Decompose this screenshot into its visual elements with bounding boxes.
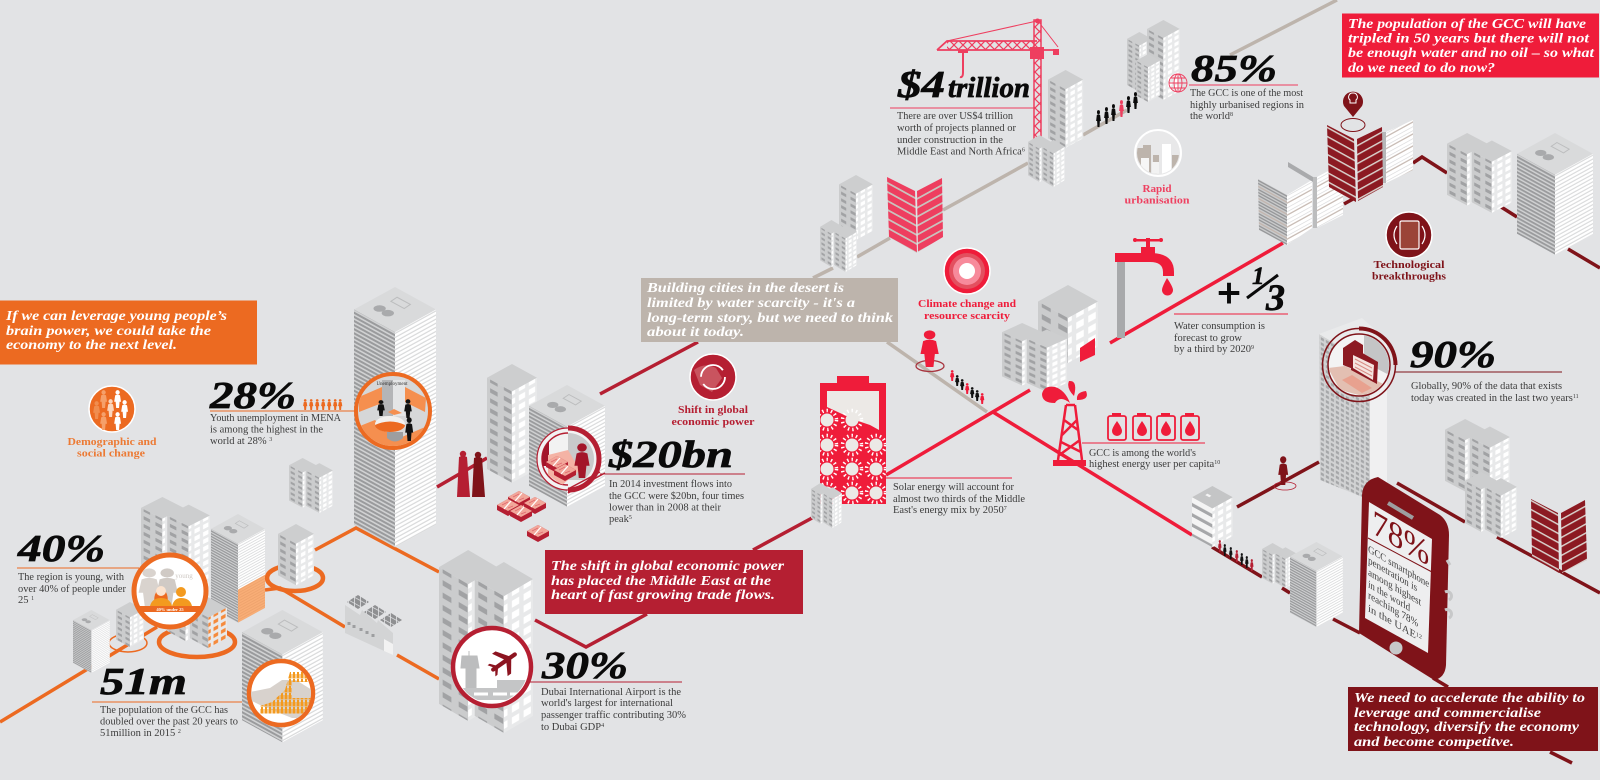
- label: climate change and resource scarcity: [918, 298, 1016, 322]
- illustration: smartphone with 78% stat: in the world: [1368, 579, 1411, 614]
- stat: $20bn investment: 5: [629, 515, 632, 521]
- stat: 90% data: 90%: [1410, 334, 1496, 376]
- stat: 30% Dubai airport: 4: [601, 723, 604, 729]
- building: wide striped complex: [1258, 162, 1343, 245]
- illustration: smartphone with 78% stat: among highest: [1368, 567, 1422, 609]
- stat: 51m population: 2: [178, 729, 181, 735]
- figures: business man on deep red line: [1274, 456, 1296, 490]
- building: small floors block: [1192, 486, 1233, 547]
- building: window tower: [487, 364, 537, 483]
- icon: fuel barrels: [1108, 413, 1199, 440]
- figures: Gulf couple: [457, 451, 485, 497]
- callout: accelerate technology: technology, diversify the economy: [1354, 720, 1580, 735]
- label: demographic and social change: [68, 436, 156, 460]
- circle: GCC population growth: [249, 661, 313, 725]
- building: tall striped tower: [354, 287, 436, 547]
- stat: 30% Dubai airport: to Dubai GDP: [541, 722, 601, 733]
- building: tower beside crane: [1048, 70, 1083, 148]
- icon: rapid urbanisation skyline: [1135, 130, 1181, 178]
- building: twin right: [1447, 133, 1512, 213]
- label: technological breakthroughs: Technological: [1374, 259, 1444, 271]
- building: twin beside crane: [1028, 135, 1065, 187]
- building: striped tower right: [1517, 133, 1593, 255]
- stat: 85% urbanised: [1189, 48, 1305, 122]
- stat: 40% young: 40%: [17, 528, 105, 570]
- building: small striped block: [73, 610, 110, 673]
- circle: unemployment meeting room: [355, 374, 430, 450]
- callout: shift in global economic power: has placed the Middle East at the: [551, 574, 771, 589]
- stat: 40% young: 25: [18, 595, 28, 606]
- route line: deep red technology path: [1212, 157, 1600, 763]
- stat: plus one third water: [1174, 263, 1288, 355]
- callout: young people's brain power: If we can leverage young people’s: [5, 309, 228, 324]
- text: solar energy: [886, 478, 1025, 516]
- illustration: smartphone with 78% stat: 12: [1416, 631, 1422, 641]
- stat: $20bn investment: the GCC were $20bn, four times: [609, 491, 744, 502]
- building: small window tower with ring: [278, 524, 314, 585]
- icon: technological breakthroughs tablet: [1386, 212, 1432, 258]
- stat: $4 trillion projects: trillion: [948, 73, 1030, 104]
- building: tower by urban line: [839, 175, 873, 240]
- label: shift in global economic power: economic power: [672, 416, 755, 428]
- building: small twin block: [289, 458, 333, 513]
- label: technological breakthroughs: [1372, 259, 1447, 282]
- stat: 30% Dubai airport: 30%: [541, 645, 628, 687]
- label: climate change and resource scarcity: resource scarcity: [924, 310, 1011, 322]
- callout: accelerate technology: and become competitve.: [1354, 735, 1514, 750]
- text: energy user per capita: 10: [1214, 460, 1220, 466]
- callout: building cities in the desert: about it today.: [647, 325, 744, 340]
- stat: plus one third water: Water consumption is: [1174, 321, 1265, 332]
- route line: taupe urbanisation path: [813, 0, 1337, 412]
- stat: 85% urbanised: the world: [1190, 111, 1230, 122]
- callout: accelerate technology: We need to accelerate the ability to: [1354, 691, 1585, 706]
- circle: young people under 25: 40% under 25: [156, 607, 184, 612]
- stat: 28% youth unemployment: [209, 375, 357, 447]
- stat: $20bn investment: $20bn: [608, 434, 733, 476]
- label: demographic and social change: social change: [77, 448, 145, 460]
- figures: people row on resource line: [950, 370, 984, 404]
- label: demographic and social change: Demographic and: [68, 436, 156, 448]
- stat: 51m population: 51m: [100, 661, 187, 703]
- label: rapid urbanisation: [1124, 183, 1190, 206]
- stat: 30% Dubai airport: [530, 645, 686, 733]
- building: large twin block: [141, 497, 210, 613]
- illustration: money stacks large: [497, 491, 546, 522]
- stat: $4 trillion projects: Middle East and North Africa: [897, 146, 1022, 158]
- callout: building cities in the desert: long-term story, but we need to think: [647, 311, 893, 326]
- label: shift in global economic power: Shift in global: [678, 404, 748, 416]
- callout: building cities in the desert: [641, 278, 898, 342]
- stat: $4 trillion projects: [890, 64, 1035, 158]
- illustration: smartphone with 78% stat: in the UAE: [1368, 603, 1416, 641]
- illustration: smartphone with 78% stat: reaching 78%: [1368, 590, 1419, 630]
- stat: 51m population: The population of the GCC has: [100, 705, 228, 716]
- callout: population tripled: be enough water and no oil – so what: [1348, 46, 1595, 61]
- stat: plus one third water: 9: [1251, 345, 1254, 351]
- text: energy user per capita: [1082, 442, 1220, 470]
- callout: shift in global economic power: The shift in global economic power: [551, 559, 785, 574]
- text: energy user per capita: GCC is among the world's: [1089, 448, 1196, 459]
- stat: 90% data: [1395, 334, 1579, 404]
- label: shift in global economic power: [672, 404, 755, 428]
- callout: young people's brain power: [0, 300, 257, 364]
- building: small twin near battery: [811, 483, 842, 528]
- stat: $20bn investment: [600, 434, 745, 525]
- building: twin upper right: [1445, 419, 1510, 499]
- illustration: solar battery: [818, 376, 886, 504]
- callout: population tripled: tripled in 50 years but there will not: [1348, 32, 1590, 46]
- figures: red man on ring: [916, 330, 944, 372]
- building: dark red facade right: [1531, 499, 1587, 573]
- stat: 51m population: 51million in 2015: [100, 728, 175, 739]
- text: solar energy: Solar energy will account for: [893, 482, 1014, 493]
- stat: 90% data: 11: [1573, 394, 1579, 400]
- stat: 85% urbanised: highly urbanised regions in: [1190, 100, 1305, 111]
- stat: 85% urbanised: The GCC is one of the most: [1190, 88, 1303, 99]
- label: rapid urbanisation: urbanisation: [1124, 194, 1190, 206]
- stat: 40% young: [17, 528, 139, 606]
- icon: shift in global economic power: [690, 354, 736, 400]
- stat: 90% data: Globally, 90% of the data that exists: [1411, 381, 1562, 392]
- building: small twin lower: [1262, 543, 1296, 588]
- building: high-rise cluster: [1127, 20, 1180, 102]
- building: small twin over battery corner: [811, 483, 842, 528]
- text: energy user per capita: highest energy user per capita: [1089, 459, 1214, 470]
- circle: young people under 25: [130, 555, 210, 627]
- stat: 51m population: doubled over the past 20 years to: [100, 716, 238, 728]
- route line: bright red resource path: [886, 243, 1283, 535]
- building: solar factory: [345, 595, 402, 655]
- stat: $4 trillion projects: worth of projects planned or: [897, 123, 1017, 134]
- callout: population tripled: do we need to do now?: [1348, 61, 1495, 76]
- stat: $20bn investment: lower than in 2008 at their: [609, 502, 721, 514]
- callout: building cities in the desert: Building cities in the desert is: [646, 281, 845, 296]
- illustration: smartphone with 78% stat: [1359, 477, 1451, 680]
- stat: 28% youth unemployment: 3: [269, 437, 272, 443]
- stat: plus one third water: 1: [1252, 263, 1264, 290]
- stat: 30% Dubai airport: world's largest for international: [541, 698, 673, 709]
- route line: red economic power path: [437, 342, 812, 647]
- stat: 30% Dubai airport: passenger traffic contributing 30%: [541, 710, 686, 721]
- building: twin block with orange windows: [167, 590, 227, 648]
- label: climate change and resource scarcity: Climate change and: [918, 298, 1016, 310]
- stat: $20bn investment: peak: [609, 514, 629, 525]
- stat: 28% youth unemployment: 28%: [209, 375, 296, 417]
- stat: 40% young: 1: [31, 596, 34, 602]
- figures: people row lower: [1218, 540, 1254, 571]
- stat: 90% data: today was created in the last two years: [1411, 393, 1573, 404]
- building: lower striped tower: [242, 610, 323, 742]
- callout: shift in global economic power: heart of fast growing trade flows.: [551, 588, 775, 603]
- figures: row of people on urban line: [1096, 92, 1138, 127]
- callout: building cities in the desert: limited by water scarcity - it's a: [647, 296, 855, 311]
- icon: lightbulb location pin: [1341, 92, 1365, 132]
- text: solar energy: East's energy mix by 2050: [893, 505, 1004, 516]
- icon: climate change target: [944, 248, 990, 294]
- stat: plus one third water: by a third by 2020: [1174, 344, 1251, 355]
- stat: 40% young: The region is young, with: [18, 572, 125, 583]
- callout: population tripled: The population of the GCC will have: [1348, 17, 1586, 32]
- illustration: smartphone with 78% stat: penetration is: [1368, 555, 1417, 594]
- callout: accelerate technology: [1348, 687, 1598, 751]
- building: tall data tower: [1319, 318, 1387, 500]
- building: red facade block: [887, 177, 943, 253]
- icon: oil derrick: [1042, 381, 1087, 466]
- building: striped block lower: [1290, 542, 1343, 627]
- callout: young people's brain power: brain power, we could take the: [6, 324, 211, 339]
- stat: plus one third water: +: [1217, 271, 1241, 317]
- stat: $4 trillion projects: 6: [1022, 148, 1025, 154]
- illustration: smartphone with 78% stat: GCC smartphone: [1368, 544, 1429, 590]
- stat: 28% youth unemployment: Youth unemployment in MENA: [210, 413, 341, 424]
- illustration: smartphone with 78% stat: 78%: [1372, 502, 1430, 574]
- callout: young people's brain power: economy to the next level.: [6, 338, 177, 353]
- stat: 28% youth unemployment: world at 28%: [210, 436, 267, 447]
- stat: 28% youth unemployment: is among the highest in the: [210, 424, 323, 436]
- circle: Dubai airport: [453, 628, 533, 706]
- stat: plus one third water: 3: [1265, 278, 1285, 319]
- label: rapid urbanisation: Rapid: [1142, 183, 1172, 195]
- text: solar energy: 7: [1004, 506, 1007, 512]
- building: striped tower behind investment figure: [529, 385, 605, 507]
- stat: $4 trillion projects: There are over US$4 trillion: [897, 111, 1014, 122]
- building: twin by urban line: [820, 220, 857, 272]
- building: airport twin block: [439, 550, 533, 733]
- stat: 85% urbanised: 8: [1230, 112, 1233, 118]
- building: white block behind red tower: [1382, 120, 1413, 183]
- illustration: construction crane: [937, 18, 1059, 140]
- circle: young people under 25: young: [175, 572, 193, 580]
- building: twin lower right: [1465, 472, 1517, 538]
- callout: accelerate technology: leverage and commercialise: [1354, 706, 1541, 721]
- route line: orange demographic path: [0, 528, 439, 722]
- text: solar energy: almost two thirds of the Middle: [893, 494, 1025, 505]
- callout: shift in global economic power: [545, 550, 803, 614]
- stat: 30% Dubai airport: Dubai International Airport is the: [541, 687, 681, 698]
- illustration: money stack small: [527, 525, 549, 542]
- stat: $20bn investment: In 2014 investment flows into: [609, 479, 732, 490]
- building: dark red facade tower: [1327, 125, 1383, 202]
- stat: $4 trillion projects: under construction in the: [897, 135, 1003, 146]
- circle: investment flows: [537, 428, 605, 493]
- building: small block left: [116, 602, 144, 647]
- stat: plus one third water: forecast to grow: [1174, 333, 1242, 344]
- building: striped tower with orange floors: [211, 514, 265, 623]
- icon: water tap: [1115, 238, 1174, 338]
- label: technological breakthroughs: breakthroughs: [1372, 270, 1447, 282]
- building: cluster beside tap: [1002, 285, 1098, 392]
- icon: globe: [1169, 74, 1187, 92]
- stat: 85% urbanised: 85%: [1191, 48, 1277, 90]
- stat: $4 trillion projects: $4: [897, 64, 945, 106]
- stat: 40% young: over 40% of people under: [18, 584, 126, 595]
- callout: population tripled: [1342, 14, 1599, 78]
- icon: demographic and social change: [89, 386, 135, 432]
- circle: unemployment meeting room: Unemployment: [376, 382, 408, 387]
- stat: 51m population: [92, 661, 242, 739]
- circle: global data: [1322, 328, 1396, 402]
